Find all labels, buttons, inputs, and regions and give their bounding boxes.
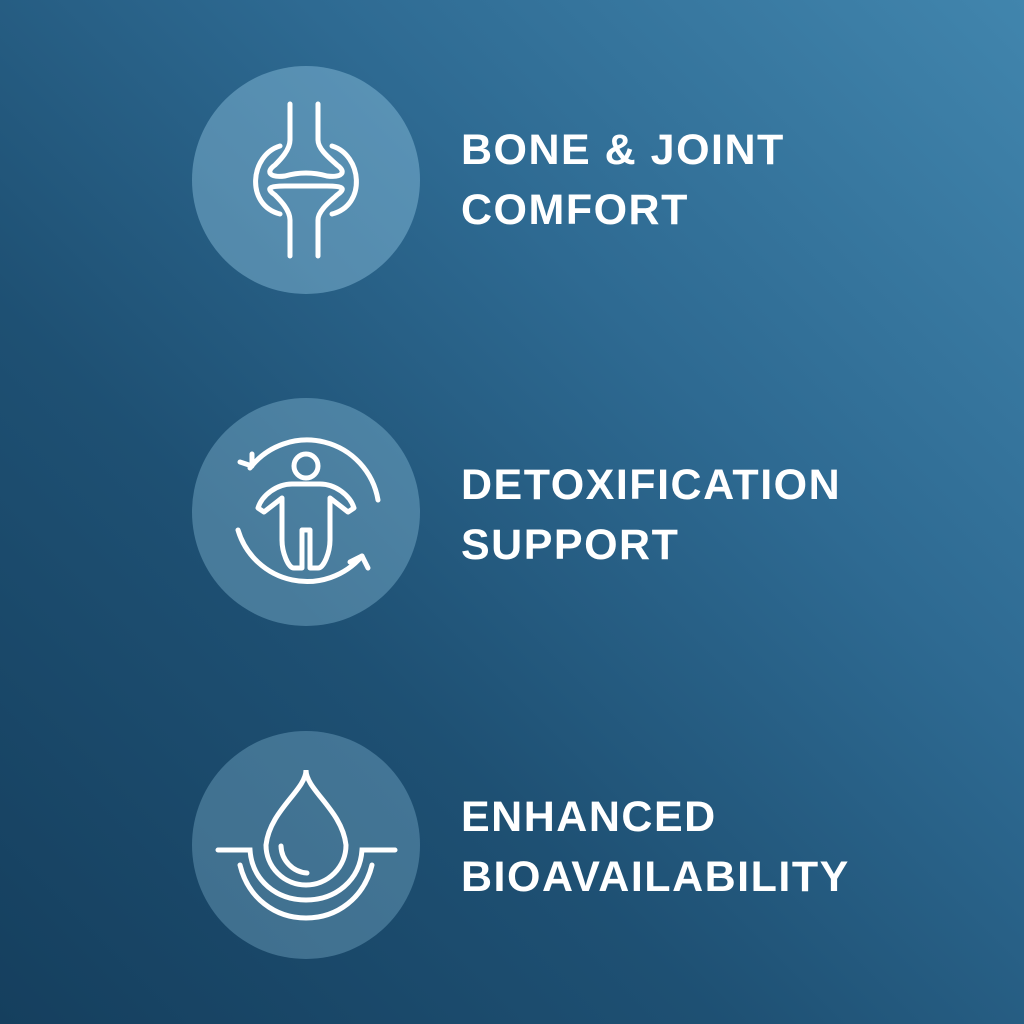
heading: enhanced bioavailability: BIOAVAILABILITY [461, 853, 850, 901]
icon: bone joint [192, 66, 420, 294]
heading: bone & joint comfort: BONE & JOINT [461, 126, 785, 174]
heading: bone & joint comfort: COMFORT [461, 186, 689, 234]
heading: detoxification support: SUPPORT [461, 521, 679, 569]
icon: detox person [192, 398, 420, 626]
heading: enhanced bioavailability [461, 793, 850, 901]
heading: bone & joint comfort [461, 126, 785, 234]
heading: detoxification support: DETOXIFICATION [461, 461, 841, 509]
heading: enhanced bioavailability: ENHANCED [461, 793, 717, 841]
icon: water drop [192, 731, 420, 959]
heading: detoxification support [461, 461, 841, 569]
